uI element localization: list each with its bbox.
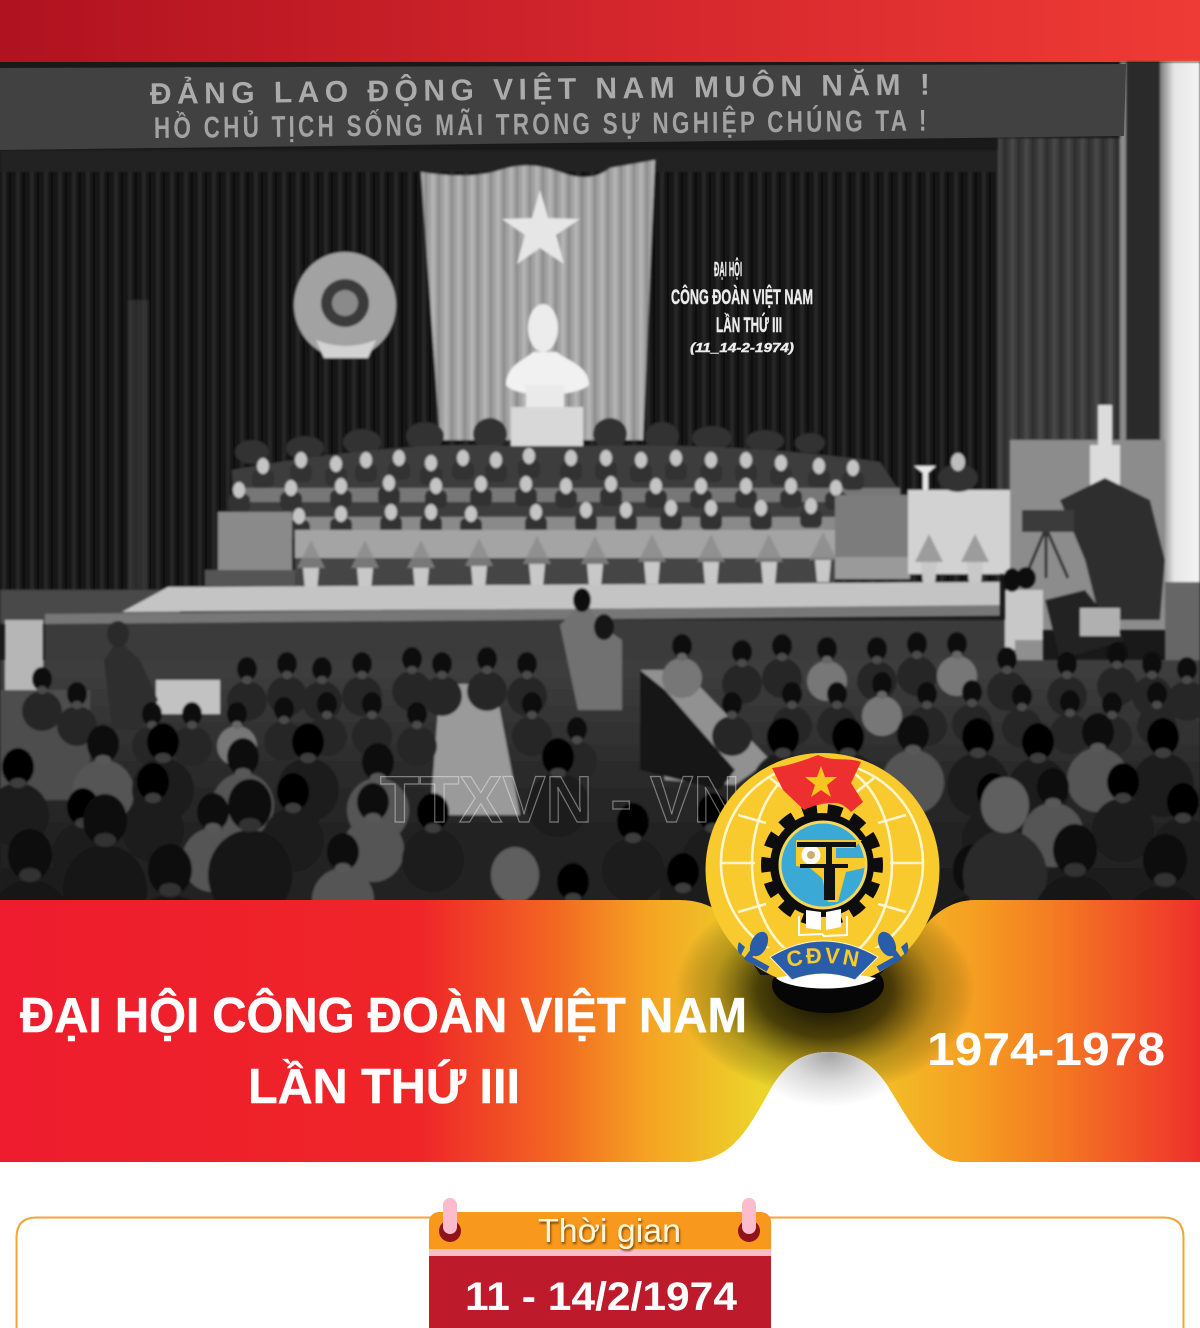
calendar right ring xyxy=(738,1198,760,1242)
photo: stage crowd xyxy=(228,445,905,538)
medal: globe meridians xyxy=(721,762,923,964)
medal drop shadow xyxy=(772,957,884,1013)
photo: bust on pedestal xyxy=(506,304,589,475)
medal: open book xyxy=(799,909,847,936)
historic photo: congress hall xyxy=(0,62,1200,995)
calendar left ring xyxy=(439,1198,461,1242)
medal: CĐVN ribbon xyxy=(738,932,908,980)
medal: left club xyxy=(738,929,772,969)
medal: white base swoosh xyxy=(776,974,876,988)
icon: trade union medal xyxy=(706,753,940,988)
photo: union emblem on curtain xyxy=(294,252,396,358)
photo: banner across stage top xyxy=(0,64,1126,150)
medal: ribbon lettering xyxy=(780,963,868,970)
medal: red flag with star xyxy=(772,755,863,812)
photo: congress sign on curtain: LẦN THỨ III xyxy=(716,313,782,337)
photo: stage curtains xyxy=(0,62,1200,610)
medal: right club xyxy=(874,929,908,969)
photo: stage floor xyxy=(0,582,1005,682)
photo: agency watermark: TTXVN - VN xyxy=(380,762,740,836)
photo: plants behind stage xyxy=(235,418,825,464)
photo: central light drape xyxy=(421,160,655,440)
photo: press photographers on the right xyxy=(1003,405,1200,676)
photo: flower pots xyxy=(297,532,989,590)
title line 1: ĐẠI HỘI CÔNG ĐOÀN VIỆT NAM xyxy=(20,988,747,1043)
medal: cog wheel xyxy=(761,804,883,926)
photo: congress sign on curtain: (11_14-2-1974) xyxy=(690,340,794,355)
top red bar xyxy=(0,0,1200,62)
photo: banner slogan line 2: HỒ CHỦ TỊCH SỐNG MÃI TRONG SỰ NGHIỆP CHÚNG TA ! xyxy=(154,103,927,145)
photo: star on drape xyxy=(502,190,580,264)
calendar: time xyxy=(429,1198,771,1328)
calendar heading: Thời gian xyxy=(538,1212,681,1249)
photo: congress sign on curtain xyxy=(671,257,813,355)
calendar pink strip xyxy=(429,1249,771,1256)
photo: banner slogan line 1: ĐẢNG LAO ĐỘNG VIỆT NAM MUÔN NĂM ! xyxy=(150,67,930,111)
bottom gradient band xyxy=(0,885,1200,1162)
calendar header xyxy=(429,1212,771,1249)
medal: blue globe with tools xyxy=(780,822,866,908)
band notch xyxy=(690,1052,960,1162)
medal: CĐVN ribbon: CĐVN xyxy=(787,948,859,967)
photo: head table and podium xyxy=(205,453,1010,586)
panel: time card outline xyxy=(16,1218,1184,1328)
photo: audience xyxy=(0,588,1200,995)
photo: congress sign on curtain: CÔNG ĐOÀN VIỆT NAM xyxy=(671,285,813,309)
term years: 1974-1978 xyxy=(927,1023,1165,1075)
photo: congress sign on curtain: ĐẠI HỘI xyxy=(714,257,742,281)
title line 2: LẦN THỨ III xyxy=(248,1059,520,1114)
title xyxy=(20,988,747,1114)
calendar date: 11 - 14/2/1974 xyxy=(465,1275,738,1319)
